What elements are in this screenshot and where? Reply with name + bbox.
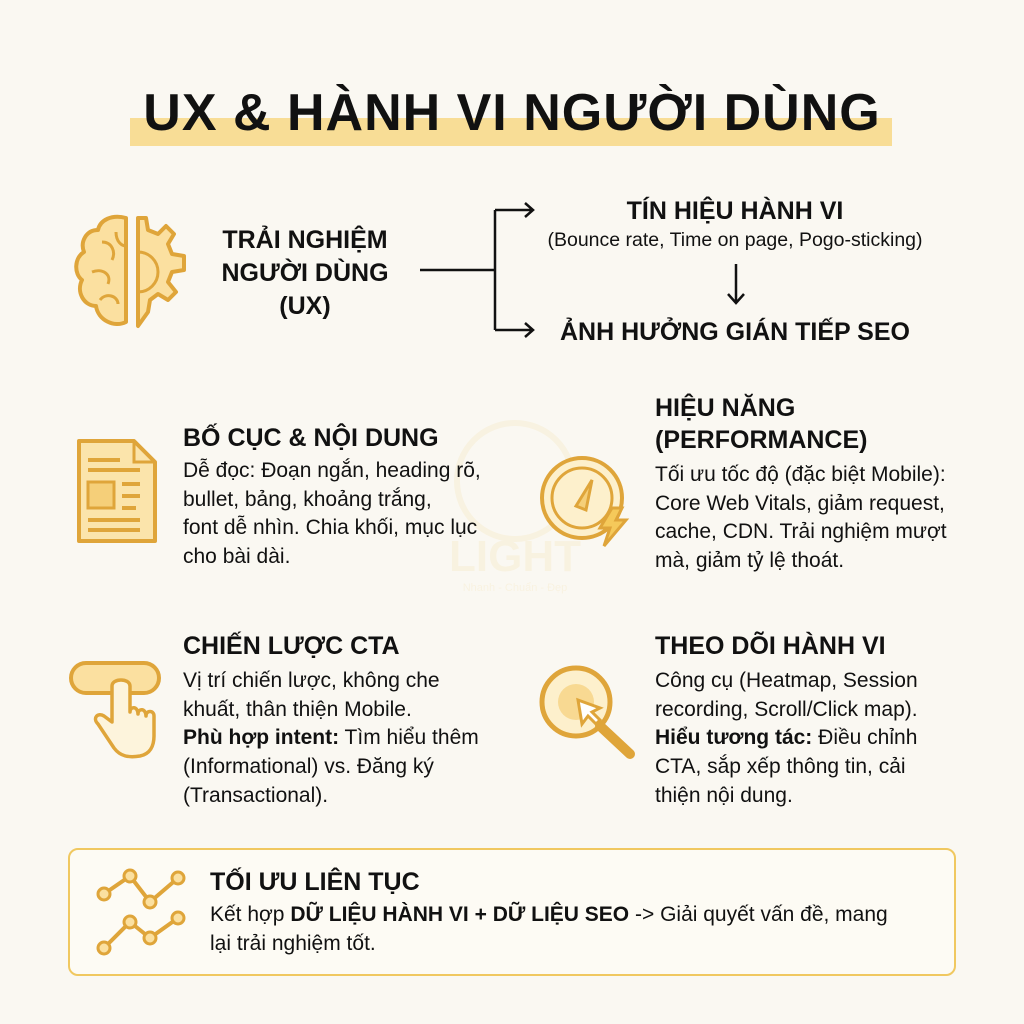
- panel: tracking: Hiểu tương tác: Điều chỉnh: [655, 726, 917, 749]
- watermark: Nhanh - Chuẩn - Đẹp: [463, 582, 567, 594]
- panel: continuous optimization: [68, 848, 956, 976]
- panel: CTA: Phù hợp intent: Tìm hiểu thêm: [183, 726, 479, 749]
- panel: performance: mà, giảm tỷ lệ thoát.: [655, 549, 844, 572]
- panel: layout content: [183, 423, 481, 568]
- panel: layout content: bullet, bảng, khoảng trắng,: [183, 488, 432, 511]
- text: behavior signals: [547, 196, 923, 251]
- icon: gauge: [540, 456, 630, 547]
- arrows: flow: [420, 202, 535, 338]
- icon: brain gear: [74, 214, 186, 328]
- panel: CTA: (Informational) vs. Đăng ký: [183, 755, 434, 778]
- icon: line chart: [96, 868, 186, 956]
- text: optimization: TỐI ƯU LIÊN TỤC: [210, 868, 420, 896]
- panel: layout content: font dễ nhìn. Chia khối, mục lục: [183, 516, 477, 539]
- heading: UX: [221, 226, 389, 320]
- panel: CTA: Vị trí chiến lược, không che: [183, 669, 440, 692]
- icon: document: [77, 439, 157, 543]
- panel: tracking: thiện nội dung.: [655, 784, 793, 807]
- panel: tracking: THEO DÕI HÀNH VI: [655, 632, 886, 660]
- title: UX & HÀNH VI NGƯỜI DÙNG: [143, 84, 881, 142]
- panel: performance: HIỆU NĂNG: [655, 394, 795, 422]
- panel: layout content: cho bài dài.: [183, 545, 290, 568]
- text: behavior signals: TÍN HIỆU HÀNH VI: [627, 197, 843, 225]
- icon: CTA hand: [69, 661, 161, 758]
- panel: performance: [655, 394, 947, 572]
- text: optimization: lại trải nghiệm tốt.: [210, 932, 376, 955]
- panel: layout content: BỐ CỤC & NỘI DUNG: [183, 424, 439, 452]
- panel: layout content: Dễ đọc: Đoạn ngắn, heading rõ,: [183, 459, 481, 482]
- text: SEO impact: ẢNH HƯỞNG GIÁN TIẾP SEO: [560, 318, 910, 346]
- panel: tracking: recording, Scroll/Click map).: [655, 698, 918, 721]
- panel: CTA: (Transactional).: [183, 784, 328, 807]
- panel: CTA: khuất, thân thiện Mobile.: [183, 698, 412, 721]
- watermark: LIGHT: [449, 532, 581, 581]
- panel: tracking: [655, 631, 918, 807]
- watermark: [449, 420, 581, 594]
- text: behavior signals: (Bounce rate, Time on page, Pogo-sticking): [547, 229, 923, 251]
- heading: UX: NGƯỜI DÙNG: [221, 259, 389, 287]
- panel: performance: (PERFORMANCE): [655, 426, 868, 454]
- panel: tracking: Công cụ (Heatmap, Session: [655, 669, 918, 692]
- arrow: down: [727, 264, 745, 305]
- icon: magnifier: [540, 666, 635, 759]
- panel: performance: cache, CDN. Trải nghiệm mượt: [655, 520, 947, 543]
- text: optimization: [210, 867, 888, 955]
- heading: UX: TRẢI NGHIỆM: [222, 226, 388, 254]
- panel: performance: Core Web Vitals, giảm request,: [655, 492, 945, 515]
- panel: performance: Tối ưu tốc độ (đặc biệt Mobile):: [655, 463, 946, 486]
- text: optimization: Kết hợp DỮ LIỆU HÀNH VI + DỮ LIỆU SEO -> Giải quyết vấn đề, mang: [210, 903, 888, 926]
- heading: UX: (UX): [279, 292, 331, 320]
- panel: CTA: [183, 632, 479, 807]
- panel: CTA: CHIẾN LƯỢC CTA: [183, 632, 400, 660]
- panel: tracking: CTA, sắp xếp thông tin, cải: [655, 755, 906, 778]
